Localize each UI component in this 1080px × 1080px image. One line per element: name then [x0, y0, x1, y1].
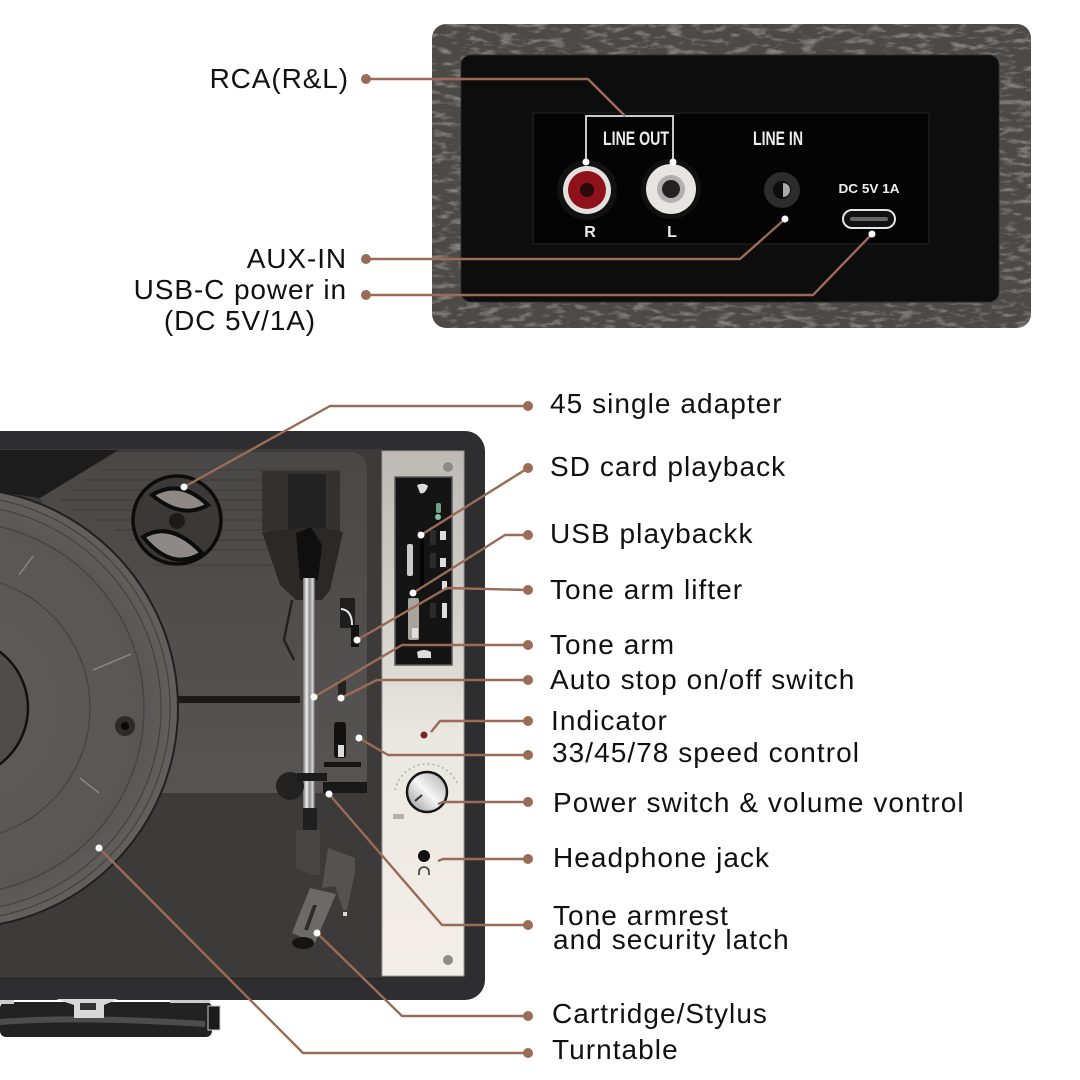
deck plate — [0, 449, 382, 978]
callout: USB-C power in: USB-C power in — [134, 274, 347, 305]
callout: Tone arm lifter: Tone arm lifter — [550, 574, 743, 605]
power and volume knob — [393, 764, 458, 819]
plinth ribbing — [60, 470, 340, 565]
callout: USB-C power in — [134, 230, 876, 336]
panel: turntable top view — [0, 431, 485, 1000]
text: LINE OUT: LINE OUT — [603, 129, 669, 150]
callout: USB-C power in: (DC 5V/1A) — [164, 305, 316, 336]
indicator light — [420, 732, 428, 738]
callout: USB playback: USB playbackk — [550, 518, 754, 549]
callout: Auto stop on/off switch: Auto stop on/off switch — [550, 664, 855, 695]
callout: Turntable: Turntable — [552, 1034, 679, 1065]
media module slot — [395, 477, 452, 665]
tone arm plinth — [40, 452, 367, 793]
callout: Tone arm: Tone arm — [550, 629, 675, 660]
text: LINE IN: LINE IN — [753, 129, 803, 150]
callout: SD card playback: SD card playback — [550, 451, 786, 482]
callout: 45 single adapter — [180, 388, 783, 490]
callout: 33/45/78 speed control — [356, 734, 860, 768]
callout: Cartridge/Stylus: Cartridge/Stylus — [552, 998, 768, 1029]
callout: SD card playback — [418, 451, 786, 538]
text: DC 5V 1A: DC 5V 1A — [838, 182, 900, 196]
icon: 45 single adapter — [133, 476, 221, 564]
callout: 45 single adapter: 45 single adapter — [550, 388, 783, 419]
silver control panel — [382, 451, 464, 976]
armrest block — [323, 782, 367, 793]
icon: AUX jack — [764, 172, 800, 208]
callout: Indicator — [431, 705, 668, 736]
callout: Auto stop on/off switch — [338, 664, 855, 702]
case body — [0, 431, 485, 1000]
text: L: L — [667, 224, 677, 241]
top shadow area — [0, 450, 118, 498]
screw — [443, 462, 453, 472]
callout: RCA(R&L) — [210, 63, 676, 166]
plinth seam — [178, 696, 300, 703]
tone arm — [262, 471, 343, 830]
black rear plate — [461, 55, 999, 302]
icon: white RCA socket — [641, 159, 701, 219]
suitcase handle and latch — [0, 999, 220, 1037]
tone arm lifter — [340, 598, 359, 647]
cartridge and headshell — [292, 830, 355, 949]
icon: USB-C port — [843, 210, 895, 228]
panel: rear connections — [432, 24, 1031, 328]
callout: Tone armrest and security latch: and security latch — [553, 924, 790, 955]
callout: USB playback — [410, 518, 754, 596]
callout: AUX-IN — [247, 216, 788, 274]
callout: RCA(R&L): RCA(R&L) — [210, 63, 349, 94]
callout: 33/45/78 speed control: 33/45/78 speed control — [552, 737, 860, 768]
callout: Power switch and volume control: Power switch & volume vontrol — [553, 787, 965, 818]
auto stop switch — [338, 680, 346, 698]
bracket joining RCA sockets — [586, 116, 673, 162]
callout: Headphone jack: Headphone jack — [553, 842, 770, 873]
callout: Tone arm — [310, 629, 675, 700]
icon: red RCA socket — [557, 160, 617, 220]
callout: AUX-IN: AUX-IN — [247, 243, 347, 274]
speed control — [324, 722, 361, 767]
callout: Turntable — [96, 844, 679, 1065]
screw lower — [443, 955, 453, 965]
turntable platter — [0, 487, 179, 929]
callout: Tone armrest and security latch: Tone armrest — [553, 900, 729, 931]
connector recess — [533, 113, 929, 244]
callout: Headphone jack — [438, 842, 770, 873]
callout: Tone armrest and security latch — [326, 790, 790, 955]
callout: Cartridge/Stylus — [314, 930, 768, 1029]
callout: Tone arm lifter — [354, 574, 743, 644]
headphone jack — [418, 850, 430, 875]
leather case — [432, 24, 1031, 328]
text: R: R — [584, 224, 596, 241]
callout: Indicator: Indicator — [551, 705, 668, 736]
